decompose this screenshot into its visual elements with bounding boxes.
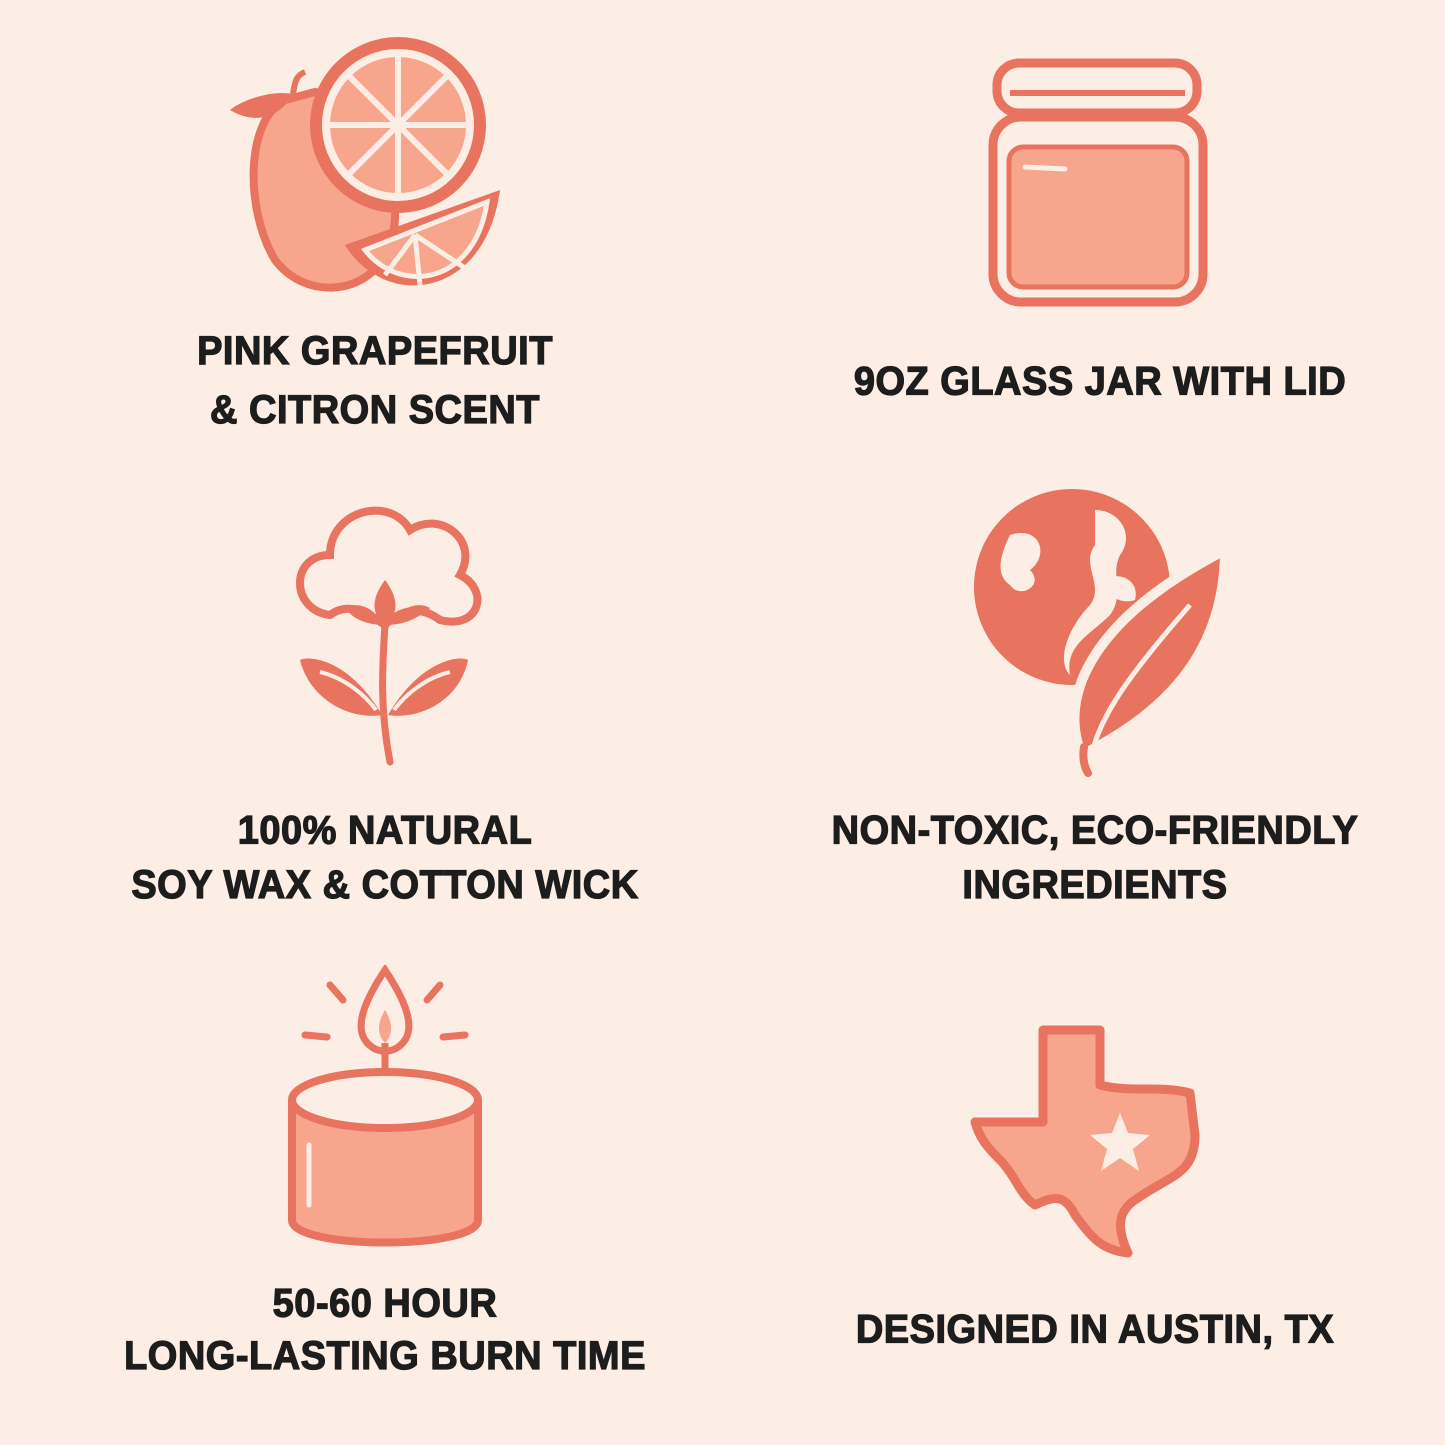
icon: cotton plant	[296, 506, 482, 766]
title: soy wax: SOY WAX & COTTON WICK	[131, 863, 639, 907]
title: eco	[832, 809, 1358, 907]
title: jar: 9OZ GLASS JAR WITH LID	[854, 360, 1346, 404]
title: austin: DESIGNED IN AUSTIN, TX	[856, 1308, 1334, 1352]
icon: glass jar	[988, 58, 1208, 306]
title: eco: INGREDIENTS	[962, 863, 1228, 907]
icon: texas	[970, 1026, 1200, 1258]
icon: grapefruit	[230, 37, 500, 292]
title: burn time: LONG-LASTING BURN TIME	[124, 1334, 646, 1378]
title: scent	[197, 330, 553, 432]
title: burn time: 50-60 HOUR	[273, 1282, 497, 1326]
title: eco: NON-TOXIC, ECO-FRIENDLY	[832, 809, 1358, 853]
title: soy wax: 100% NATURAL	[238, 809, 532, 853]
title: burn time	[124, 1282, 646, 1378]
icon: earth and leaf	[974, 489, 1220, 777]
title: scent: & CITRON SCENT	[210, 388, 540, 432]
title: scent: PINK GRAPEFRUIT	[197, 330, 553, 374]
icon: candle	[288, 965, 482, 1246]
title: soy wax	[131, 809, 639, 907]
